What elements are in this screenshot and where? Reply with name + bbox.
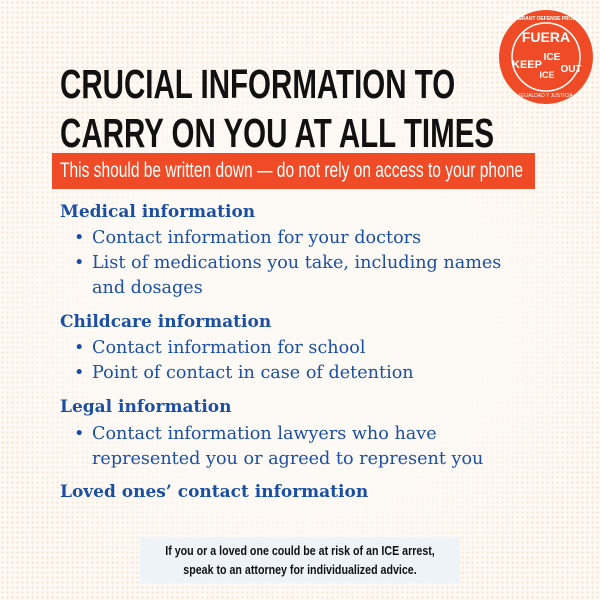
section: loved ones: Loved ones’ contact information	[60, 482, 368, 502]
text: Legal information	[60, 397, 232, 417]
text: Contact information for school	[92, 338, 365, 358]
footer note: speak to an attorney for individualized advice.	[183, 562, 417, 577]
section: medical	[60, 202, 501, 298]
text: Point of contact in case of detention	[92, 363, 414, 383]
logo: IMMIGRANT DEFENSE PROJECT	[507, 16, 585, 22]
logo: OUT	[560, 64, 582, 75]
text: represented you or agreed to represent you	[92, 449, 483, 469]
text: Childcare information	[60, 312, 271, 332]
logo	[499, 10, 593, 104]
subtitle banner: This should be written down — do not rely on access to your phone	[60, 159, 523, 182]
text: •	[74, 424, 84, 444]
footer note	[140, 537, 460, 583]
text: List of medications you take, including names	[92, 253, 501, 273]
text: CRUCIAL INFORMATION TO	[60, 61, 455, 107]
text: Contact information lawyers who have	[92, 424, 437, 444]
subtitle banner	[52, 153, 535, 189]
text: CARRY ON YOU AT ALL TIMES	[60, 110, 494, 156]
section: legal	[60, 397, 483, 469]
logo: KEEP	[512, 59, 542, 71]
text: •	[74, 363, 84, 383]
footer note: If you or a loved one could be at risk of an ICE arrest,	[165, 543, 435, 558]
logo: FUERA	[522, 29, 570, 45]
text: •	[74, 253, 84, 273]
title	[60, 61, 494, 156]
text: •	[74, 338, 84, 358]
text: •	[74, 228, 84, 248]
section: childcare	[60, 312, 414, 383]
text: Medical information	[60, 202, 255, 222]
logo: IGUALDAD Y JUSTICIA	[519, 93, 574, 99]
text: Contact information for your doctors	[92, 228, 421, 248]
text: and dosages	[92, 278, 203, 298]
logo: ICE	[544, 52, 561, 63]
logo: ICE	[539, 70, 555, 80]
